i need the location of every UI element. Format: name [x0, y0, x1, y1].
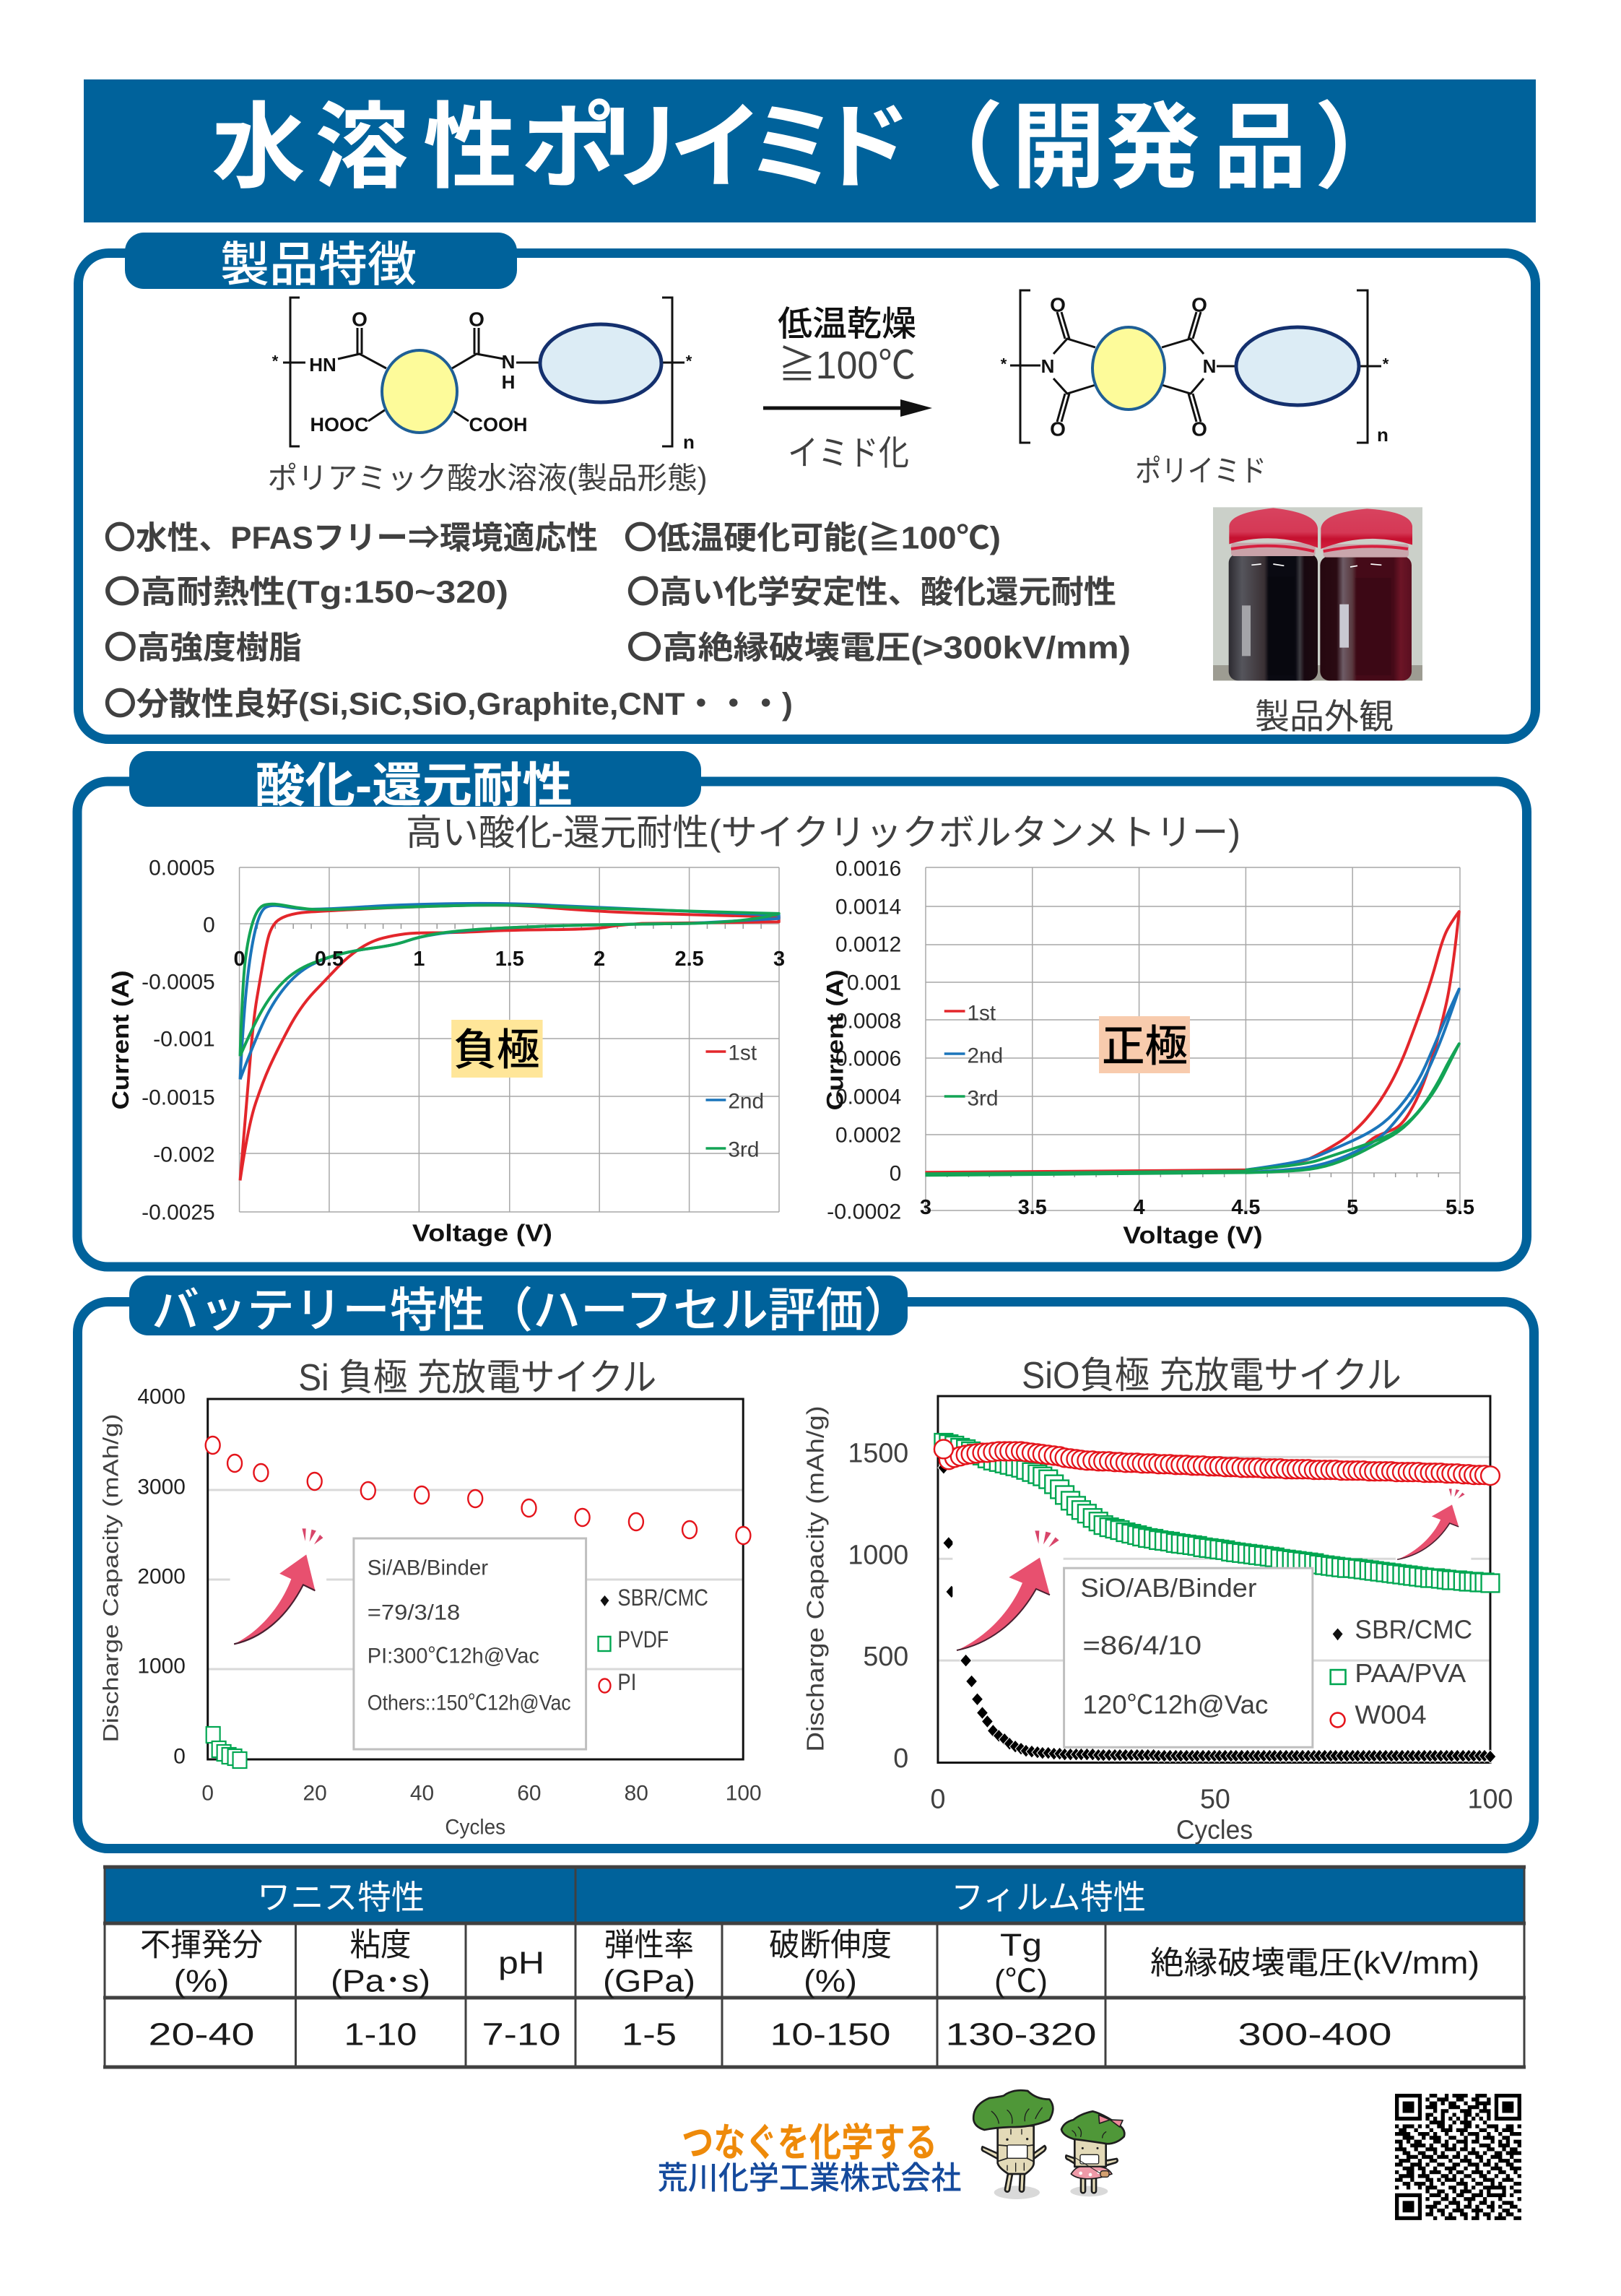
properties table [103, 1867, 1526, 2067]
panel: バッテリー特性 [78, 1275, 1534, 1849]
chart: SiO cycle [801, 1354, 1513, 1845]
y axis labels: 2000 [137, 1564, 186, 1589]
y axis labels: 0.0006 [835, 1047, 901, 1071]
title band: 水溶性ポリイミド（開発品） [212, 95, 1408, 200]
x axis labels [930, 1784, 1513, 1814]
y axis labels [137, 1385, 186, 1769]
y axis labels: 0 [173, 1744, 186, 1769]
y axis labels: 4000 [137, 1385, 186, 1409]
chart: Si cycle [100, 1356, 762, 1840]
legend: 3rd [728, 1138, 759, 1162]
x axis labels: 20 [303, 1781, 327, 1806]
reaction arrow with conditions: イミド化 [788, 435, 909, 472]
heading: バッテリー特性: バッテリー特性（ハーフセル評価） [152, 1283, 911, 1337]
x axis labels: 5.5 [1446, 1196, 1474, 1219]
y axis labels: 3000 [137, 1475, 186, 1499]
row: property names: 絶縁破壊電圧(kV/mm) [1150, 1946, 1479, 1980]
y axis labels [142, 856, 215, 1225]
chemical structure: polyimide: O [1050, 293, 1066, 316]
row: property names: 粘度 [349, 1927, 412, 1963]
chart: negative electrode CV [107, 856, 785, 1247]
row: property names: (℃) [994, 1963, 1048, 1999]
CV curves [925, 911, 1459, 1174]
x axis labels: 0 [234, 948, 245, 971]
y axis labels: 0 [890, 1161, 901, 1186]
feature list: 〇高強度樹脂 [104, 630, 302, 666]
legend: 3rd [968, 1086, 998, 1111]
row: values: 10-150 [770, 2016, 891, 2053]
x axis labels: 1 [413, 948, 425, 971]
legend: SBR/CMC [1355, 1615, 1472, 1644]
y axis labels: 1000 [137, 1654, 186, 1678]
row: values [149, 2016, 1392, 2053]
chemical structure: polyamic acid: n [683, 431, 695, 453]
y axis labels [827, 857, 901, 1224]
chemical structure: polyamic acid: COOH [469, 414, 527, 436]
y axis labels: -0.0002 [827, 1200, 901, 1224]
heading: 製品特徴 [125, 233, 517, 291]
y axis labels: 1500 [848, 1437, 908, 1468]
x axis labels: 1.5 [495, 948, 524, 971]
series: PVDF [207, 1727, 246, 1768]
row: property names: (GPa) [603, 1963, 695, 1999]
row: property names: 不揮発分 [140, 1927, 263, 1963]
x axis labels: 40 [410, 1781, 434, 1806]
chart title: Si 負極 充放電サイクル [298, 1356, 656, 1398]
axis titles: Cycles [445, 1815, 505, 1840]
chemical structure: polyimide: N [1041, 355, 1054, 377]
y axis labels: 0.0016 [835, 857, 901, 881]
feature list: 〇分散性良好(Si,SiC,SiO,Graphite,CNT・・・) [104, 686, 793, 722]
heading: 酸化-還元耐性 [129, 751, 701, 812]
row: property names [140, 1927, 1479, 1999]
chart: Si cycle: Discharge Capacity (mAh/g) [100, 1414, 123, 1742]
legend: 2nd [968, 1044, 1003, 1068]
x axis labels: 0.5 [315, 948, 344, 971]
legend [599, 1585, 708, 1695]
x axis labels: 50 [1200, 1784, 1230, 1814]
conditions box: PI:300℃12h@Vac [368, 1644, 539, 1668]
row: property names: pH [498, 1946, 544, 1980]
x axis labels: 100 [1467, 1784, 1513, 1814]
series: SBR/CMC [944, 1468, 1490, 1756]
arrow: right [1396, 1488, 1471, 1563]
x axis labels: 80 [625, 1781, 648, 1806]
chart: positive electrode CV: Current (A) [822, 969, 848, 1111]
chemical structure: polyimide: N [1203, 355, 1216, 377]
feature list [104, 520, 1131, 722]
chemical structure: polyimide: * [1001, 355, 1007, 373]
chemical structure: polyimide [1001, 290, 1389, 446]
heading: 酸化-還元耐性: 酸化-還元耐性 [255, 758, 573, 812]
label: 負極: 負極 [453, 1026, 540, 1075]
conditions box: 120℃12h@Vac [1082, 1691, 1268, 1720]
feature list: 〇高い化学安定性、酸化還元耐性 [627, 575, 1116, 610]
x axis labels: 0 [201, 1781, 214, 1806]
chemical structure: polyamic acid: * [686, 352, 692, 370]
x axis labels: 5 [1347, 1196, 1358, 1219]
row: property names: (Pa･s) [331, 1963, 430, 1999]
legend: PAA/PVA [1355, 1659, 1466, 1688]
row: property names: 弾性率 [604, 1927, 694, 1963]
chemical structure: polyimide: O [1191, 417, 1207, 441]
label: ポリイミド: ポリイミド [1135, 454, 1266, 488]
chart title: SiO負極 充放電サイクル [1022, 1354, 1401, 1396]
legend [705, 1041, 764, 1162]
legend: 1st [968, 1001, 996, 1026]
table header: フィルム特性 [951, 1879, 1146, 1916]
chemical structure: polyimide: * [1383, 355, 1389, 373]
conditions box [354, 1538, 586, 1749]
chemical structure: polyamic acid [272, 298, 695, 453]
title band [84, 79, 1536, 222]
chemical structure: polyimide: O [1191, 293, 1207, 316]
label: 製品外観: 製品外観 [1255, 698, 1394, 737]
row: property names: (%) [804, 1963, 857, 1999]
series: PI [206, 1437, 750, 1544]
table header [105, 1868, 1524, 1923]
conditions box [1064, 1568, 1313, 1747]
chemical structure: polyamic acid: * [272, 352, 279, 370]
label: 正極: 正極 [1102, 1022, 1188, 1071]
conditions box: =79/3/18 [368, 1600, 460, 1625]
y axis labels: 0 [893, 1743, 908, 1773]
conditions box: Si/AB/Binder [368, 1556, 488, 1580]
chemical structure: polyamic acid: HN [309, 354, 336, 376]
label: ポリアミック酸水溶液: ポリアミック酸水溶液(製品形態) [267, 461, 708, 495]
legend [944, 1001, 1003, 1111]
x axis labels: 100 [726, 1781, 762, 1806]
x axis labels: 2.5 [675, 948, 704, 971]
x axis labels: 4.5 [1231, 1196, 1260, 1219]
conditions box: Others::150℃12h@Vac [368, 1691, 571, 1715]
row: values: 300-400 [1238, 2016, 1392, 2053]
y axis labels: 0.0014 [835, 895, 901, 919]
legend [1331, 1615, 1472, 1730]
company logo text: 荒川化学工業株式会社 [657, 2161, 962, 2196]
row: property names: 破断伸度 [769, 1927, 892, 1963]
chemical structure: polyamic acid: O [469, 308, 484, 331]
conditions box: =86/4/10 [1082, 1631, 1201, 1660]
row: property names: Tg [1000, 1927, 1042, 1963]
feature list: 〇高耐熱性(Tg:150~320) [104, 575, 508, 610]
legend: SBR/CMC [617, 1585, 708, 1611]
x axis labels: 3.5 [1018, 1196, 1047, 1219]
legend: W004 [1355, 1701, 1427, 1730]
heading: 製品特徴: 製品特徴 [220, 238, 417, 291]
chart: negative electrode CV: Current (A) [107, 971, 134, 1109]
x axis labels: 3 [773, 948, 785, 971]
feature list: 〇低温硬化可能(≧100℃) [624, 520, 1001, 556]
icon: QR code [1395, 2094, 1521, 2220]
reaction arrow with conditions: ≧100℃ [778, 344, 916, 387]
chemical structure: polyamic acid: H [502, 371, 515, 393]
row: values: 1-10 [344, 2016, 417, 2053]
legend: PVDF [617, 1626, 669, 1652]
series: PAA/PVA [944, 1443, 1490, 1583]
product photo: two jars [1213, 507, 1422, 680]
panel: 製品特徴 [78, 233, 1535, 740]
x axis labels [201, 1781, 762, 1806]
x axis labels: 0 [930, 1784, 945, 1814]
row: values: 130-320 [946, 2016, 1096, 2053]
legend: 2nd [728, 1089, 764, 1114]
y axis labels: -0.0025 [142, 1200, 215, 1225]
legend: PI [617, 1669, 636, 1695]
y axis labels: 500 [863, 1641, 908, 1671]
y axis labels: 0.0005 [149, 856, 215, 880]
x axis labels [234, 948, 785, 971]
x axis labels: 4 [1134, 1196, 1145, 1219]
feature list: 〇高絶縁破壊電圧(>300kV/mm) [627, 630, 1131, 666]
company logo text [657, 2121, 962, 2196]
axis titles: Cycles [1176, 1815, 1253, 1845]
x axis labels: 60 [517, 1781, 542, 1806]
chemical structure: polyamic acid: N [502, 351, 515, 373]
icon: mascot characters [973, 2090, 1124, 2199]
chart: SiO cycle: Discharge Capacity (mAh/g) [801, 1405, 829, 1752]
row: values: 1-5 [622, 2016, 677, 2053]
chemical structure: polyimide: O [1050, 417, 1066, 441]
x axis labels [920, 1196, 1474, 1219]
y axis labels: 0.0012 [835, 932, 901, 957]
series: W004 [949, 1451, 1490, 1476]
y axis labels: 0.0008 [835, 1009, 901, 1034]
y axis labels: 0.0002 [835, 1123, 901, 1148]
chemical structure: polyimide: n [1377, 424, 1389, 446]
subtitle: 高い酸化-還元耐性(サイクリックボルタンメトリー) [406, 813, 1240, 853]
row: values: 7-10 [482, 2016, 560, 2053]
chemical structure: polyamic acid: HOOC [310, 414, 368, 436]
y axis labels: 0.0004 [835, 1085, 901, 1109]
conditions box: SiO/AB/Binder [1080, 1574, 1257, 1603]
y axis labels: -0.001 [153, 1027, 215, 1052]
reaction arrow with conditions [763, 305, 932, 472]
y axis labels: -0.0015 [142, 1086, 215, 1110]
chemical structure: polyamic acid: O [352, 308, 368, 331]
y axis labels: 0 [203, 913, 215, 937]
axis titles: Voltage (V) [412, 1219, 552, 1247]
arrow: left [952, 1524, 1064, 1654]
y axis labels: -0.0005 [142, 970, 215, 995]
company logo text: つなぐを化学する [682, 2121, 937, 2165]
y axis labels [848, 1437, 908, 1773]
legend: 1st [728, 1041, 757, 1065]
table header: ワニス特性 [257, 1879, 425, 1916]
CV curves [240, 904, 779, 1180]
row: property names: (%) [173, 1963, 230, 1999]
reaction arrow with conditions: 低温乾燥 [778, 305, 916, 344]
x axis labels: 3 [920, 1196, 931, 1219]
feature list: 〇水性、PFASフリー⇒環境適応性 [104, 520, 598, 556]
y axis labels: 0.001 [847, 971, 901, 995]
panel: 酸化-還元耐性 [77, 751, 1526, 1267]
axis titles: Voltage (V) [1123, 1221, 1263, 1249]
y axis labels: 1000 [848, 1539, 908, 1569]
row: values: 20-40 [149, 2016, 254, 2053]
chart: positive electrode CV [822, 857, 1474, 1249]
y axis labels: -0.002 [153, 1143, 215, 1167]
x axis labels: 2 [594, 948, 605, 971]
arrow [230, 1527, 326, 1650]
